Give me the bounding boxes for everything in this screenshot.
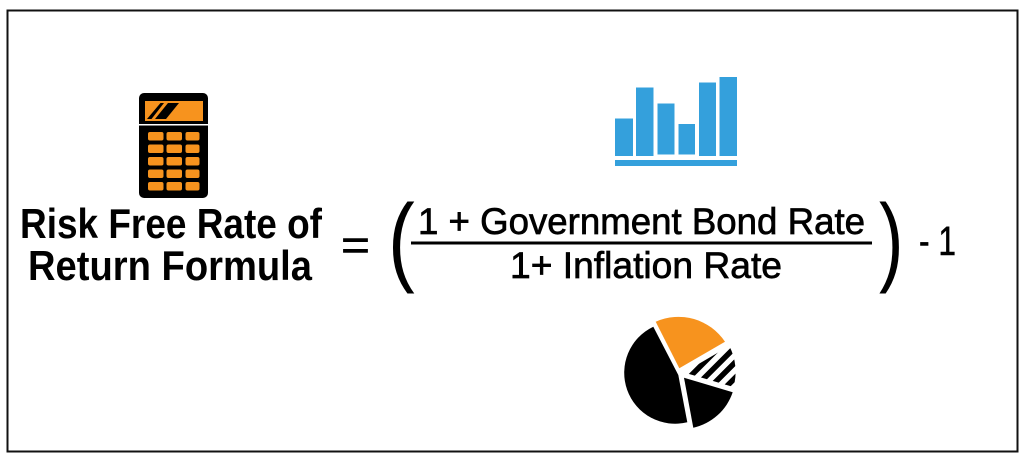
minus one: - 1 bbox=[919, 218, 956, 264]
icon: bar chart bbox=[615, 77, 737, 166]
title: Risk Free Rate of bbox=[20, 200, 323, 247]
title: Return Formula bbox=[28, 242, 313, 289]
title bbox=[20, 200, 323, 289]
icon: pie chart bbox=[624, 316, 736, 428]
denominator: 1+ Inflation Rate bbox=[510, 245, 782, 286]
right parenthesis: ) bbox=[879, 186, 903, 294]
fraction bar bbox=[411, 242, 872, 244]
icon: calculator bbox=[139, 93, 208, 198]
equals sign: = bbox=[341, 221, 370, 270]
left parenthesis: ( bbox=[388, 184, 415, 294]
formula bbox=[341, 184, 956, 294]
numerator: 1 + Government Bond Rate bbox=[418, 201, 865, 242]
